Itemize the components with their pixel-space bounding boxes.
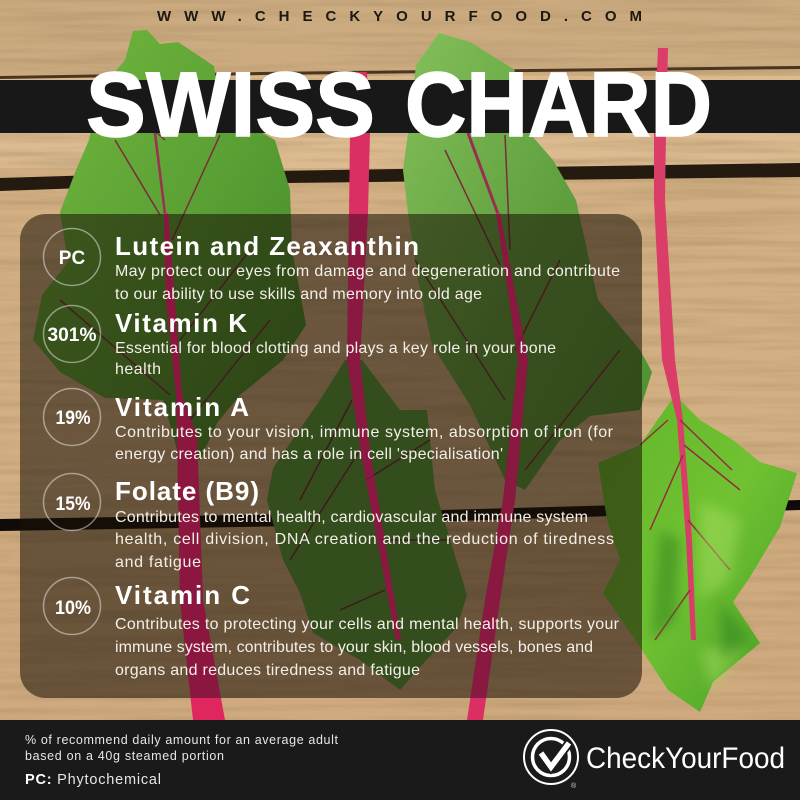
description <box>115 424 614 463</box>
description <box>115 509 614 571</box>
leaf 2 with stem <box>267 72 467 690</box>
title: SWISS <box>86 54 375 156</box>
badge: 15% <box>44 474 100 530</box>
nutrient: vitamin k <box>44 306 556 378</box>
badge: PC: PC <box>59 248 85 269</box>
heading: Lutein and Zeaxanthin <box>115 231 419 261</box>
description: energy creation) and has a role in cell 'specialisation' <box>115 446 503 463</box>
badge: 301%: 301% <box>48 325 97 346</box>
description: and fatigue <box>115 554 201 571</box>
panel: nutrients backdrop <box>20 214 642 698</box>
description: Contributes to protecting your cells and mental health, supports your <box>115 616 620 633</box>
description: health <box>115 361 161 378</box>
description: health, cell division, DNA creation and the reduction of tiredness <box>115 531 614 548</box>
badge: 19%: 19% <box>56 408 91 429</box>
website url: WWW.CHECKYOURFOOD.COM <box>157 8 642 25</box>
description: Contributes to your vision, immune system, absorption of iron (for <box>115 424 614 441</box>
nutrient: folate <box>44 474 614 571</box>
description <box>115 616 620 679</box>
brand name: CheckYourFood <box>586 742 785 775</box>
footnote: based on a 40g steamed portion <box>25 749 224 763</box>
badge: PC <box>44 228 100 286</box>
nutrient: vitamin c <box>44 578 620 679</box>
badge: 15%: 15% <box>56 494 91 515</box>
description: to our ability to use skills and memory into old age <box>115 286 482 303</box>
nutrient: lutein and zeaxanthin <box>44 228 620 303</box>
description <box>115 340 556 378</box>
badge: 301% <box>44 306 100 362</box>
heading: Vitamin K <box>115 308 247 338</box>
footnote: PC: Phytochemical <box>25 772 161 788</box>
description: Essential for blood clotting and plays a key role in your bone <box>115 340 556 357</box>
badge: 19% <box>44 388 100 446</box>
description: immune system, contributes to your skin, blood vessels, bones and <box>115 639 593 656</box>
icon: check your food logo mark <box>524 730 578 790</box>
footer bar <box>0 720 800 800</box>
description: May protect our eyes from damage and degeneration and contribute <box>115 263 620 280</box>
title band <box>0 80 800 133</box>
stems tint under panel <box>164 214 528 698</box>
leaf 3 with stem <box>403 33 652 720</box>
leaf 4 with stem <box>598 48 797 712</box>
icon: check your food logo mark: ® <box>571 782 577 790</box>
nutrient: vitamin a <box>44 388 614 463</box>
heading: Vitamin A <box>115 392 249 422</box>
footnote <box>25 733 339 788</box>
description: Contributes to mental health, cardiovascular and immune system <box>115 509 588 526</box>
leaf 1 with stem <box>33 30 306 720</box>
heading: Vitamin C <box>115 580 250 610</box>
heading: Folate (B9) <box>115 476 259 506</box>
footnote: % of recommend daily amount for an average adult <box>25 733 339 747</box>
badge: 10% <box>44 578 100 634</box>
title: CHARD <box>405 54 712 156</box>
title <box>86 54 712 156</box>
description <box>115 263 620 303</box>
description: organs and reduces tiredness and fatigue <box>115 662 420 679</box>
badge: 10%: 10% <box>55 598 91 619</box>
